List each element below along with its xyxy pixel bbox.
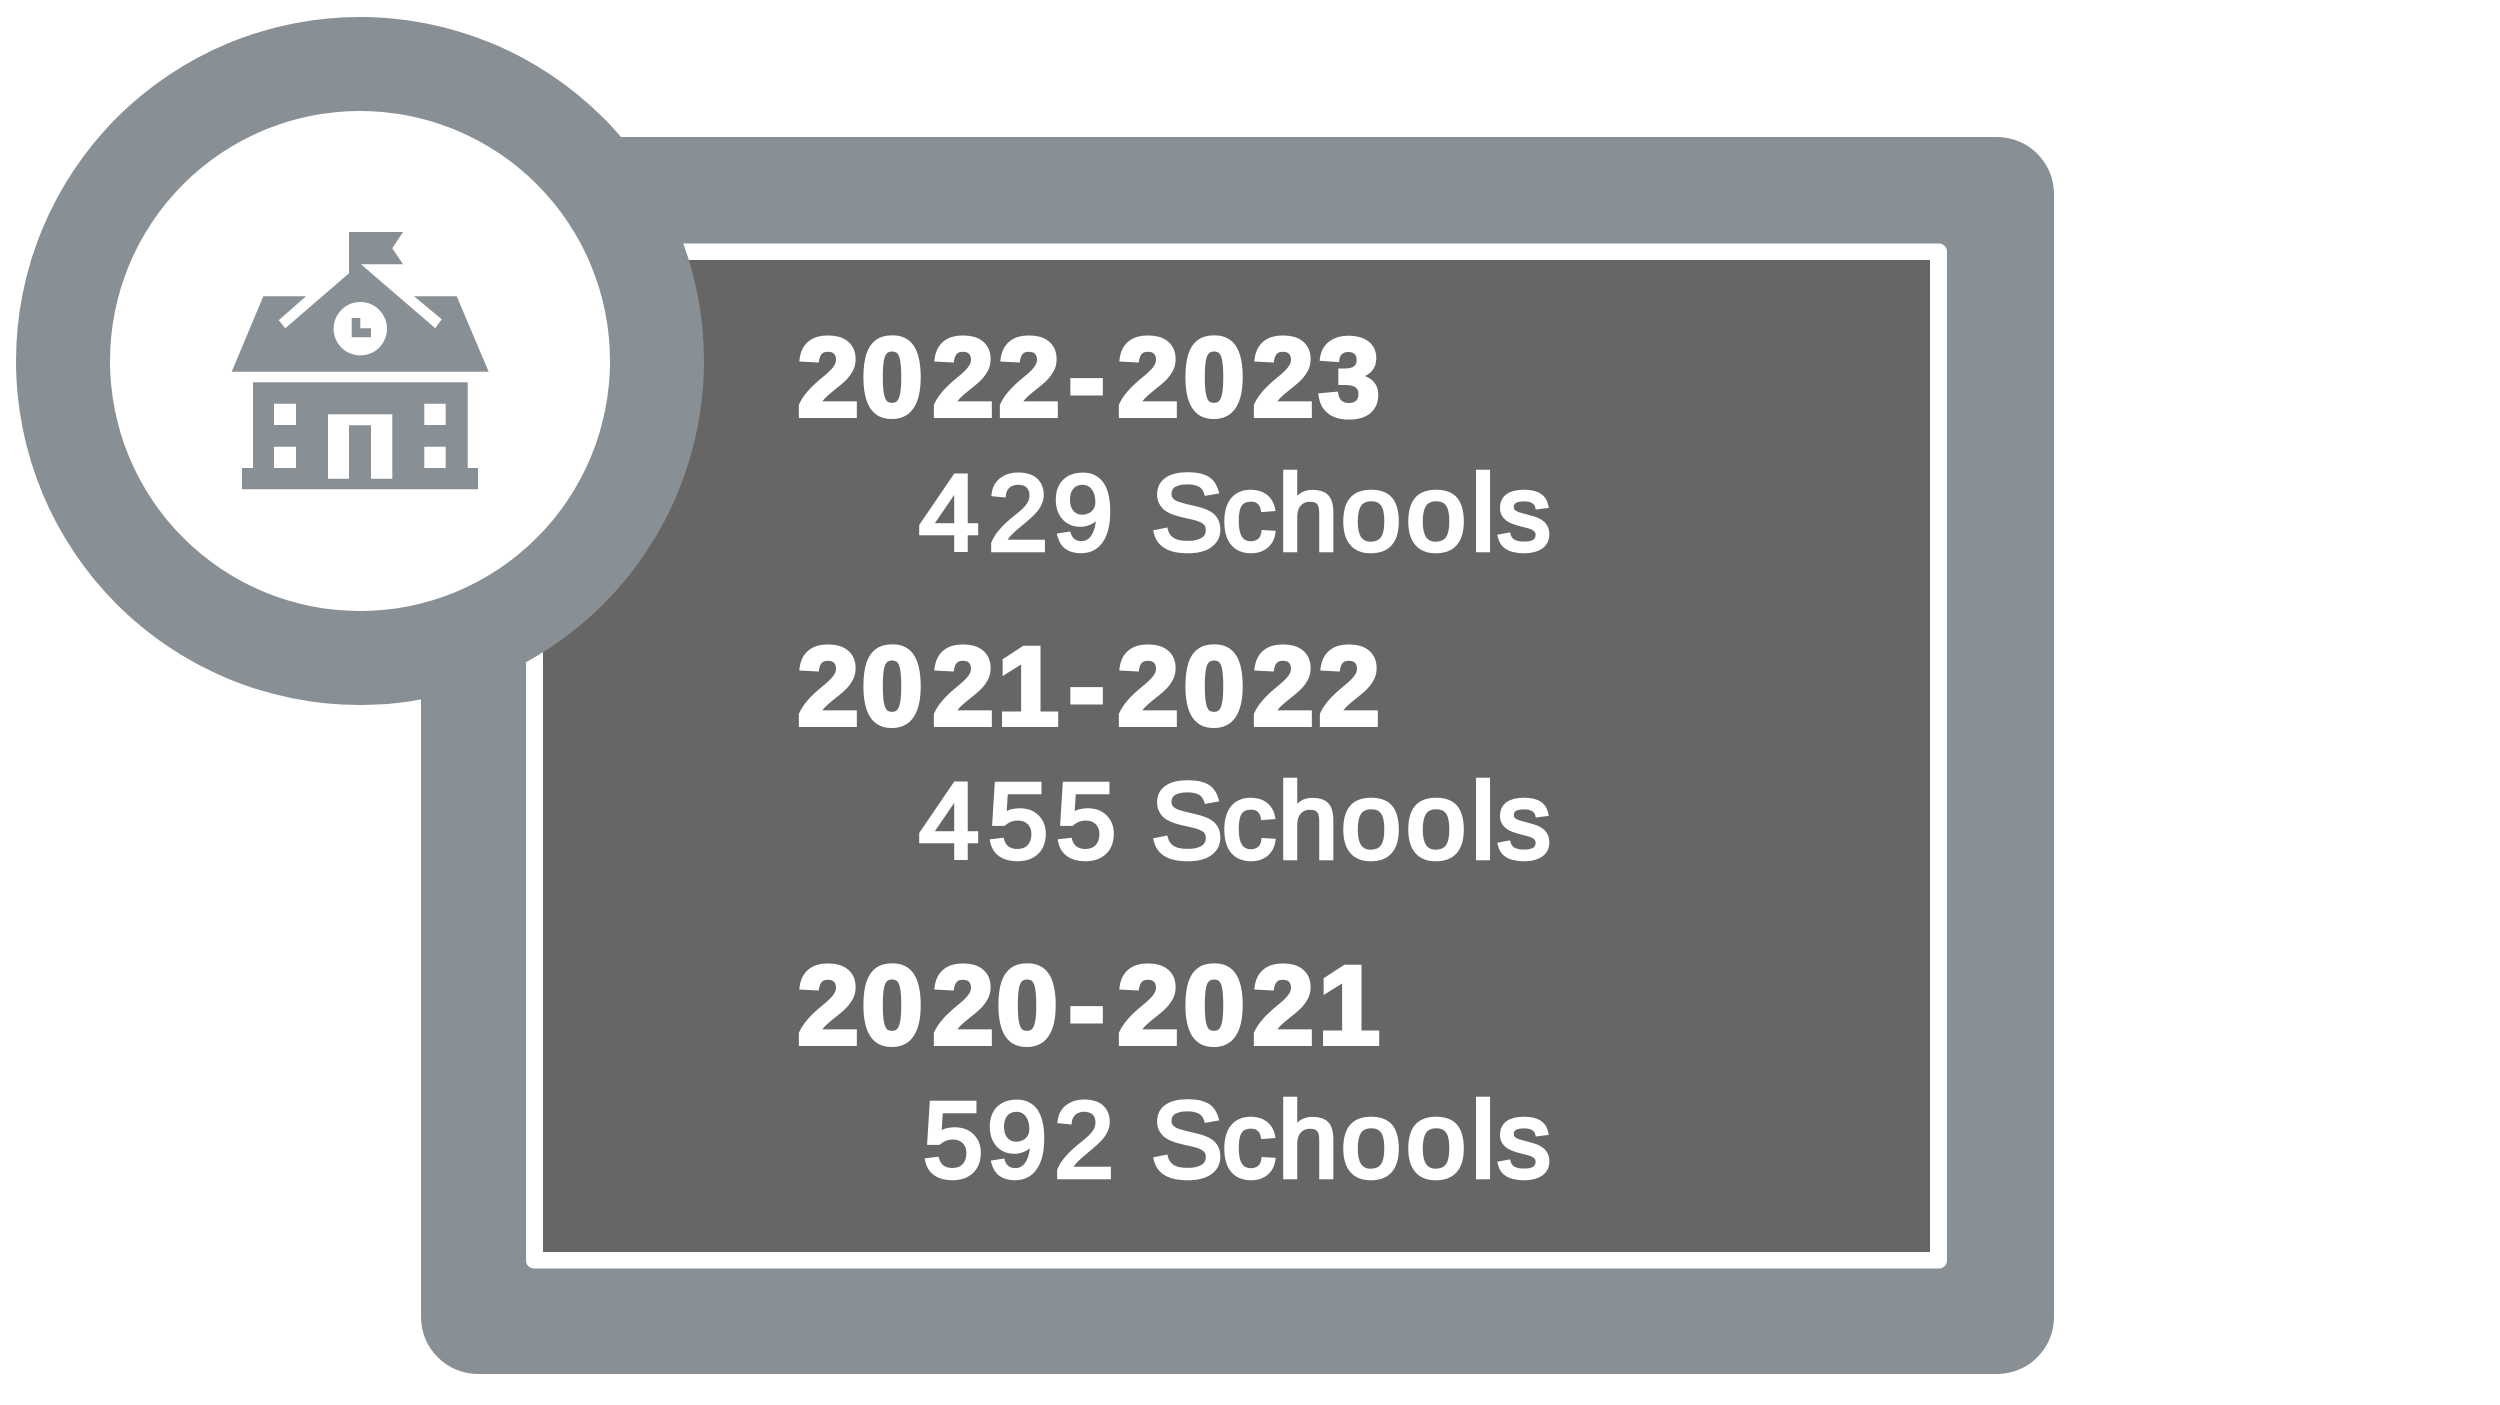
text: 2020-2021 heading: 2020-2021 bbox=[797, 943, 1380, 1068]
icon: clock bbox=[334, 302, 387, 355]
text: 2021-2022 heading: 2021-2022 bbox=[797, 624, 1380, 749]
icon: building body with windows and door bbox=[242, 382, 478, 489]
icon: roof with flag bbox=[232, 232, 489, 372]
panel: chalkboard frame bbox=[421, 137, 2054, 1374]
badge: circle with school icon bbox=[16, 17, 704, 705]
text: 2022-2023 heading: 2022-2023 bbox=[797, 315, 1380, 440]
text: 455 Schools: 455 Schools bbox=[919, 760, 1551, 881]
text: 429 Schools: 429 Schools bbox=[919, 452, 1551, 573]
icon: school building bbox=[232, 232, 489, 489]
panel: chalkboard surface with white border bbox=[526, 244, 1947, 1268]
text: 592 Schools: 592 Schools bbox=[923, 1079, 1551, 1200]
